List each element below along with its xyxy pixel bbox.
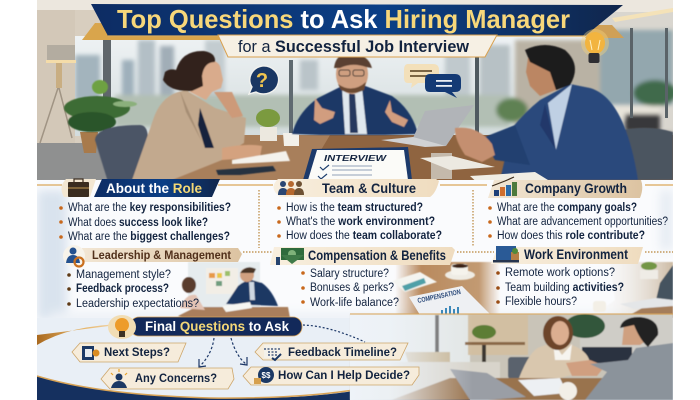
- subtitle: for a Successful Job Interview: [238, 37, 470, 56]
- compensation heading: Compensation & Benefits: [308, 248, 446, 263]
- floor lamp: [40, 45, 76, 143]
- section: about the role: [59, 179, 231, 243]
- work environment heading: Work Environment: [524, 247, 628, 262]
- laptop on table: [381, 105, 474, 147]
- meeting table: [322, 135, 673, 180]
- question speech bubble icon: [249, 66, 279, 94]
- about the role questions: What are the biggest challenges?: [68, 231, 230, 243]
- icon: light bulb: [108, 315, 136, 339]
- compensation questions: Work-life balance?: [310, 297, 399, 309]
- work environment questions: [496, 267, 624, 308]
- team and culture questions: How is the team structured?: [286, 202, 423, 214]
- main title: Top Questions to Ask Hiring Manager: [117, 4, 570, 34]
- work environment questions: Remote work options?: [505, 267, 615, 279]
- leadership questions: Management style?: [76, 269, 171, 281]
- icon: money speech bubble: [254, 367, 274, 384]
- work environment ribbon: [491, 247, 643, 264]
- feedback timeline label: Feedback Timeline?: [288, 347, 397, 359]
- company growth questions: How does this role contribute?: [497, 230, 645, 242]
- office photo background: [37, 0, 677, 185]
- section: company growth: [488, 177, 668, 242]
- dashed arrows: [199, 325, 365, 367]
- question speech bubble icon: ?: [256, 70, 268, 92]
- potted plant: [64, 80, 137, 153]
- final questions background: [37, 318, 673, 400]
- leadership ribbon: [82, 248, 242, 262]
- icon: money speech bubble: $$: [262, 371, 271, 380]
- about the role questions: What are the key responsibilities?: [68, 202, 231, 214]
- leadership questions: Leadership expectations?: [76, 298, 199, 310]
- callout: any concerns: [101, 368, 234, 389]
- leadership meeting photo: [178, 262, 290, 320]
- woman candidate: [95, 51, 290, 182]
- leadership questions: Feedback process?: [76, 283, 169, 295]
- how can i help decide label: How Can I Help Decide?: [278, 370, 410, 382]
- interview clipboard: INTERVIEW: [324, 154, 388, 163]
- leadership heading: Leadership & Management: [92, 248, 231, 262]
- icon: money: [276, 248, 304, 265]
- section: team and culture: [273, 179, 442, 242]
- chat bubbles icon: [404, 64, 461, 98]
- work environment desk photo: [590, 262, 673, 318]
- title banner: [82, 4, 624, 40]
- icon: calendar check: [264, 345, 281, 360]
- icon: checklist: [82, 346, 100, 360]
- compensation questions: [301, 268, 399, 309]
- section: work environment: [491, 246, 643, 308]
- interview clipboard: [303, 147, 412, 180]
- company growth heading: Company Growth: [525, 181, 627, 196]
- about the role heading: About the Role: [106, 181, 202, 196]
- compensation questions: Bonuses & perks?: [310, 282, 394, 294]
- final questions heading pill: [130, 317, 302, 336]
- section: compensation and benefits: [270, 247, 455, 309]
- icon: team: [278, 181, 304, 195]
- icon: briefcase: [61, 179, 96, 197]
- desk plant and cup: [256, 109, 299, 146]
- subtitle banner: [218, 35, 497, 57]
- company growth questions: What are the company goals?: [497, 202, 637, 214]
- handshake office photo: [350, 314, 673, 400]
- any concerns label: Any Concerns?: [135, 373, 217, 385]
- company growth ribbon: [488, 180, 642, 198]
- about the role questions: [59, 202, 231, 243]
- team and culture ribbon: [273, 179, 439, 197]
- callout: next steps: [72, 343, 186, 362]
- icon: person alert: [111, 369, 127, 388]
- icon: glowing light bulb: [581, 29, 609, 63]
- icon: growth chart: [492, 177, 517, 196]
- about the role questions: What does success look like?: [68, 217, 208, 229]
- team and culture heading: Team & Culture: [322, 181, 416, 196]
- team and culture questions: How does the team collaborate?: [286, 230, 442, 242]
- callout: how can i help decide: [243, 367, 419, 385]
- team and culture questions: [277, 202, 442, 242]
- team and culture questions: What's the work environment?: [286, 216, 435, 228]
- icon: leader and gear: [63, 245, 85, 267]
- company growth questions: What are advancement opportunities?: [497, 216, 668, 228]
- leadership questions: [67, 269, 199, 310]
- final questions heading pill: Final Questions to Ask: [145, 319, 289, 334]
- section: leadership and management: [63, 245, 242, 310]
- glass and papers: [420, 153, 548, 180]
- work environment questions: Flexible hours?: [505, 296, 577, 308]
- question sections backdrop: [37, 180, 673, 332]
- work environment questions: Team building activities?: [505, 282, 624, 294]
- company growth questions: [488, 202, 668, 242]
- male interviewer: [292, 54, 418, 135]
- candidate man: [455, 45, 673, 180]
- icon: laptop and plant: [493, 246, 519, 262]
- about the role ribbon: [94, 179, 220, 197]
- compensation desk photo: COMPENSATION: [417, 289, 461, 305]
- compensation ribbon: [270, 247, 455, 265]
- next steps label: Next Steps?: [104, 347, 170, 359]
- compensation questions: Salary structure?: [310, 268, 389, 280]
- callout: feedback timeline: [255, 343, 408, 360]
- compensation desk photo: [392, 262, 500, 320]
